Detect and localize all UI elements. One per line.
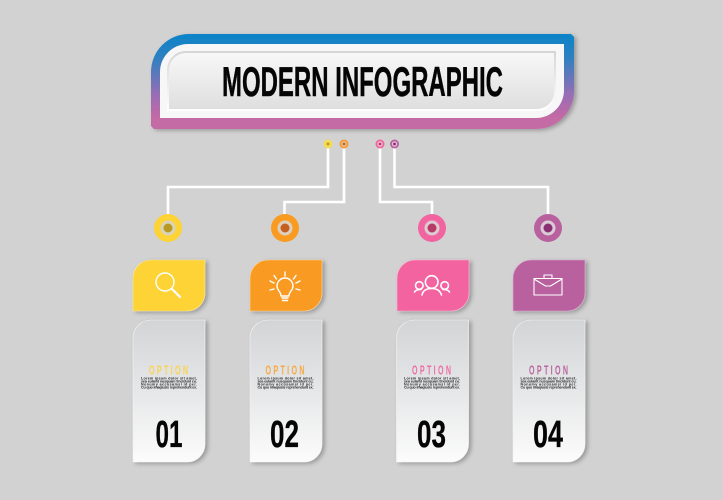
icon: briefcase [534,275,562,295]
title: MODERN INFOGRAPHIC [222,58,503,105]
body text: sea eulamt nusquam tincidunt cu. [520,380,576,384]
body text: Cu quo imaqiusis reprehendunt ex. [520,386,576,390]
node: orange [271,214,299,242]
title banner [151,34,574,129]
body text: Lorem ipsum dolor sit amet, [404,376,460,380]
tile: purple briefcase [513,260,585,311]
option heading: OPTION [412,365,451,378]
number: 02 [270,414,299,456]
body text: Nonumy accusamsi id per. [141,382,197,386]
tile: pink people [397,260,469,311]
number: 04 [533,414,563,456]
body text: Lorem ipsum dolor sit amet, [258,376,314,380]
body text: sea eulamt nusquam tincidunt cu. [404,380,460,384]
body text [141,376,197,390]
icon: people [414,276,450,295]
body text: Nonumy accusamsi id per. [258,382,314,386]
connector: purple [390,140,548,216]
body text [520,376,576,390]
icon: magnifier [156,273,180,297]
connector: orange [284,140,348,216]
connector: pink [376,140,432,216]
option heading: OPTION [266,365,305,378]
number: 01 [156,414,182,456]
body text: Cu quo imaqiusis reprehendunt ex. [404,386,460,390]
tile: orange lightbulb [250,260,322,311]
body text: Lorem ipsum dolor sit amet, [520,376,576,380]
number: 03 [417,414,446,456]
body text [258,376,314,390]
body text: Nonumy accusamsi id per. [404,382,460,386]
body text: Nonumy accusamsi id per. [520,382,576,386]
card 01 [133,320,205,462]
body text [404,376,460,390]
node: pink [418,214,446,242]
body text: sea eulamt nusquam tincidunt cu. [258,380,314,384]
option heading: OPTION [149,365,188,378]
card 03 [396,320,468,462]
card 04 [513,320,585,462]
body text: Cu quo imaqiusis reprehendunt ex. [141,386,197,390]
option heading: OPTION [529,365,568,378]
icon: lightbulb [270,272,300,300]
card 02 [250,320,322,462]
connector: yellow [168,140,332,216]
body text: Lorem ipsum dolor sit amet, [141,376,197,380]
body text: Cu quo imaqiusis reprehendunt ex. [258,386,314,390]
tile: yellow search [133,260,205,311]
node: yellow [154,214,182,242]
node: purple [534,214,562,242]
body text: sea eulamt nusquam tincidunt cu. [141,380,197,384]
